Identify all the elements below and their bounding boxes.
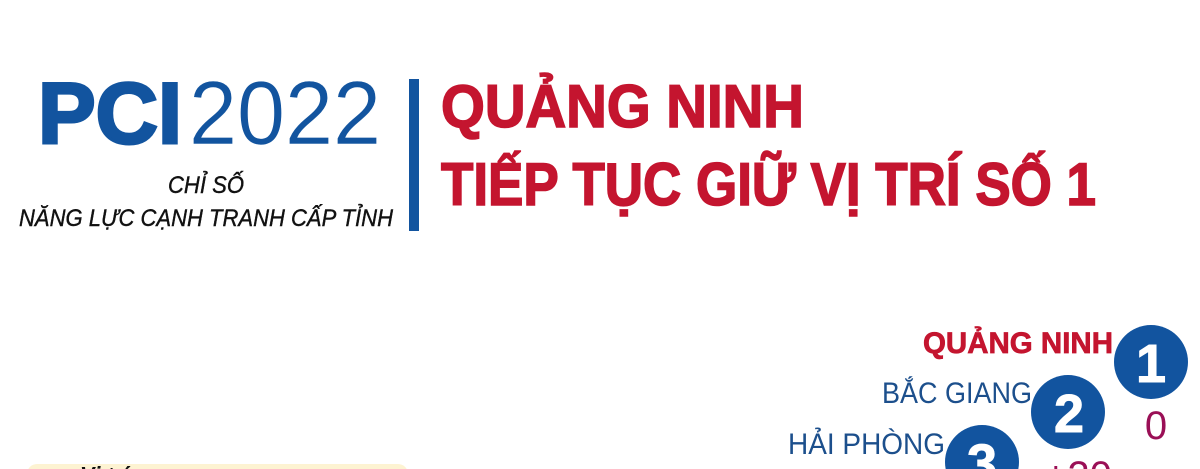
rank 3: Hải Phòng: HẢI PHÒNG <box>788 427 945 461</box>
rank 1: Quảng Ninh <box>923 325 1188 399</box>
headline: QUẢNG NINH <box>441 73 804 140</box>
headline <box>441 73 1096 218</box>
subtitle: provincial competitiveness index <box>19 170 394 232</box>
rank 1: Quảng Ninh: 1 <box>1136 334 1166 394</box>
rank 1: Quảng Ninh: QUẢNG NINH <box>923 326 1113 360</box>
rank change: Quảng Ninh 0: 0 <box>1145 404 1167 448</box>
subtitle: provincial competitiveness index: NĂNG LỰC CẠNH TRANH CẤP TỈNH <box>19 203 394 232</box>
logo: PCI2022: 2022 <box>189 64 381 164</box>
logo: PCI2022: PCI <box>38 66 182 162</box>
rank 2: Bắc Giang <box>882 375 1105 449</box>
headline: TIẾP TỤC GIỮ VỊ TRÍ SỐ 1 <box>441 151 1096 218</box>
rank 2: Bắc Giang: 2 <box>1054 384 1084 444</box>
rank 3: Hải Phòng <box>788 425 1019 469</box>
vertical divider <box>409 79 419 231</box>
subtitle: provincial competitiveness index: CHỈ SỐ <box>168 170 244 199</box>
logo: PCI2022 <box>38 64 381 164</box>
rank 2: Bắc Giang: BẮC GIANG <box>882 376 1032 410</box>
yellow info panel <box>27 461 408 469</box>
